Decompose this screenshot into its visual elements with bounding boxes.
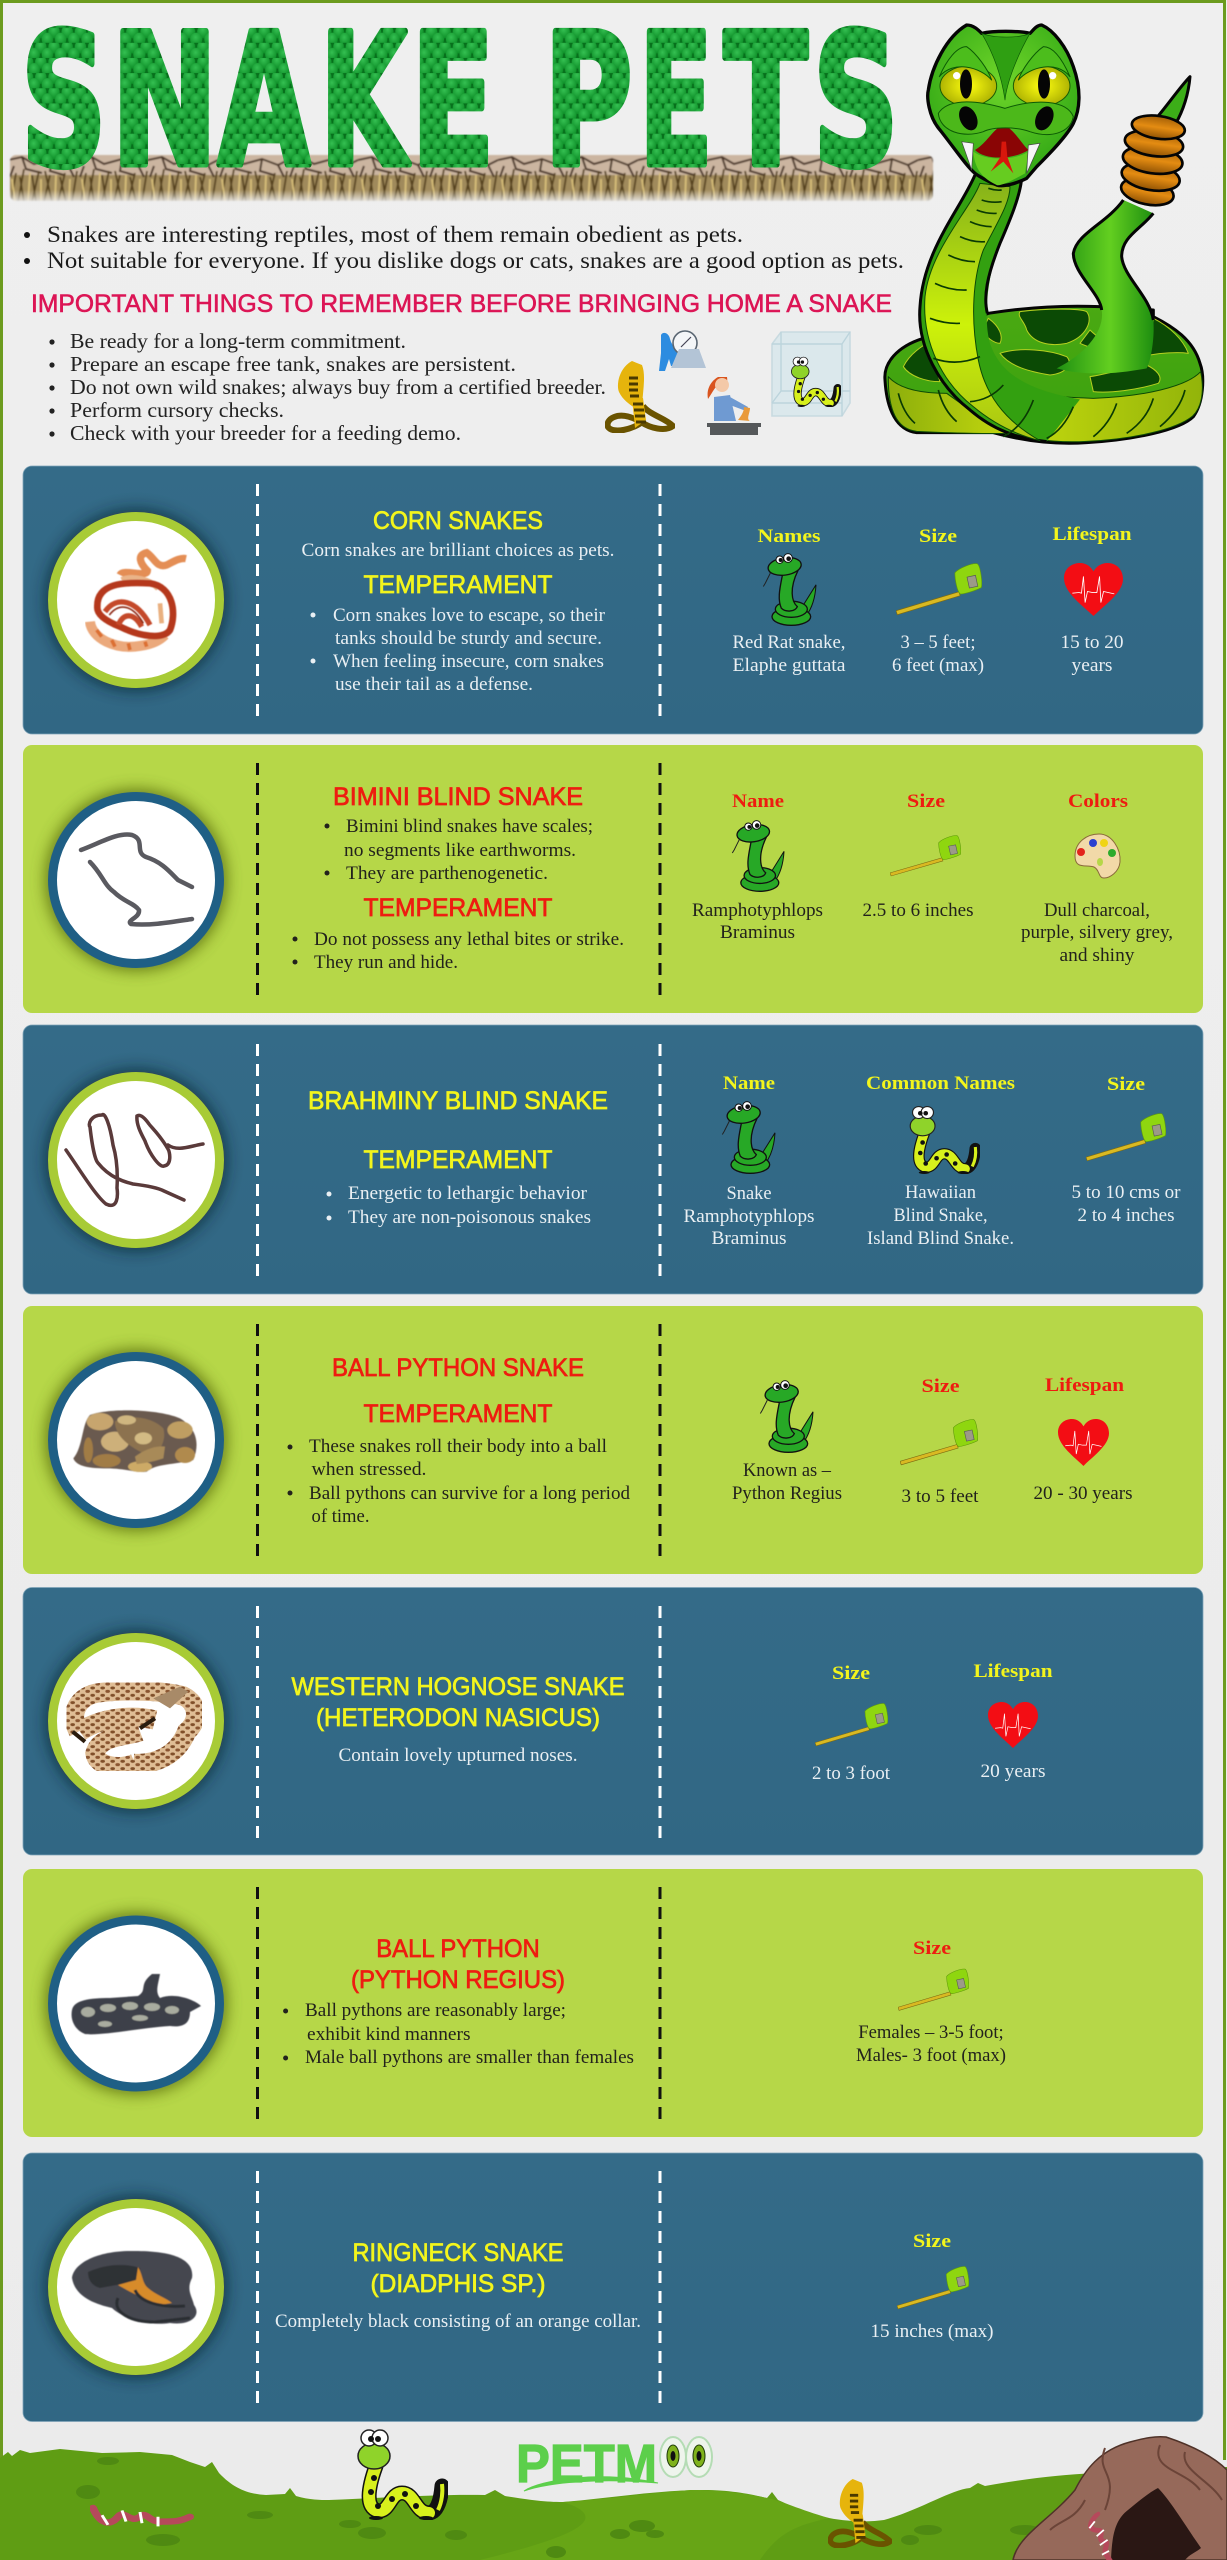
fact: size: Males- 3 foot (max) <box>856 2046 1006 2066</box>
fact: size <box>862 791 974 921</box>
fact: names: Red Rat snake, <box>732 633 846 653</box>
fact: size: 2 to 4 inches <box>1078 1206 1174 1226</box>
fact: known as: Known as – <box>743 1461 832 1481</box>
fact: colors: Colors <box>1068 791 1128 812</box>
heading: BALL PYTHON SNAKE <box>332 1354 584 1382</box>
head <box>928 25 1079 186</box>
coil markings <box>903 309 1188 392</box>
fact: name: Snake <box>726 1184 772 1204</box>
fact: size: Size <box>907 791 945 812</box>
brows <box>939 47 992 80</box>
fact: name <box>684 1073 814 1249</box>
panel: bimini blind snake <box>23 745 1203 1013</box>
body <box>920 175 1080 442</box>
heading: (PYTHON REGIUS) <box>351 1966 565 1994</box>
photo: hognose snake <box>46 1631 226 1811</box>
photo: bimini blind snake <box>46 790 226 970</box>
fact: name: Braminus <box>720 923 795 943</box>
description: Corn snakes are brilliant choices as pets. <box>302 541 614 561</box>
lower jaw <box>973 152 1028 185</box>
icon: cobra <box>608 361 673 431</box>
fact: name: Braminus <box>712 1229 786 1249</box>
title: N <box>111 0 218 208</box>
title: P <box>544 0 632 208</box>
checklist: Do not own wild snakes; always buy from a certified breeder. <box>70 375 606 399</box>
logo: petmoo: PETM <box>516 2434 657 2494</box>
description list: They are parthenogenetic. <box>346 864 548 884</box>
description list: Male ball pythons are smaller than females <box>305 2048 634 2068</box>
temperament list: use their tail as a defense. <box>335 675 533 695</box>
description list <box>283 2001 634 2068</box>
fact: size <box>892 526 984 676</box>
title: K <box>320 0 410 207</box>
temperament list: When feeling insecure, corn snakes <box>333 652 604 672</box>
heading: (HETERODON NASICUS) <box>316 1704 600 1732</box>
fact: size <box>870 2231 994 2342</box>
heading: RINGNECK SNAKE <box>352 2239 564 2267</box>
fact: size: Females – 3-5 foot; <box>858 2023 1004 2043</box>
logo: petmoo: OO <box>661 2439 712 2476</box>
fact: lifespan: years <box>1072 656 1112 676</box>
fact: size: Size <box>919 526 957 547</box>
photo: corn snake <box>46 510 226 690</box>
temperament list <box>310 606 605 695</box>
heading: temperament: TEMPERAMENT <box>364 1400 552 1428</box>
description list: no segments like earthworms. <box>344 841 576 861</box>
fact: size: Size <box>1107 1074 1145 1095</box>
fact: colors: and shiny <box>1060 946 1135 966</box>
tail tip <box>1153 77 1190 125</box>
belly ribs <box>898 188 1185 438</box>
title: S <box>21 0 107 208</box>
fact: common names: Blind Snake, <box>894 1206 988 1226</box>
heading: BRAHMINY BLIND SNAKE <box>308 1087 608 1115</box>
coil <box>885 306 1203 443</box>
fact: common names: Hawaiian <box>905 1183 976 1203</box>
subheading: IMPORTANT THINGS TO REMEMBER BEFORE BRINGING HOME A SNAKE <box>31 290 892 318</box>
temperament list: Corn snakes love to escape, so their <box>333 606 605 626</box>
fact: size: 3 to 5 feet <box>902 1487 979 1507</box>
eyes <box>940 66 997 106</box>
heading: CORN SNAKES <box>373 507 543 535</box>
fact: size: 6 feet (max) <box>892 656 984 676</box>
fact: size: 2.5 to 6 inches <box>862 901 974 921</box>
heading: BALL PYTHON <box>376 1935 540 1963</box>
intro text: Not suitable for everyone. If you dislike dogs or cats, snakes are a good option as pets. <box>47 248 904 273</box>
heading <box>352 2239 564 2298</box>
temperament list: They run and hide. <box>314 953 458 973</box>
head stripe <box>982 33 1030 100</box>
title: T <box>724 0 807 207</box>
title <box>21 0 899 208</box>
tail outline <box>1073 200 1153 320</box>
fact: size: 15 inches (max) <box>870 2322 994 2342</box>
fact: colors: purple, silvery grey, <box>1021 923 1173 943</box>
belly <box>925 183 1040 441</box>
fact: lifespan <box>1052 524 1132 676</box>
fact: lifespan <box>974 1661 1053 1782</box>
fact: name: Ramphotyphlops <box>692 901 823 921</box>
fact: size: Size <box>913 2231 951 2252</box>
fact: size: 3 – 5 feet; <box>900 633 976 653</box>
fact: names: Elaphe guttata <box>732 656 846 676</box>
fact: size: 5 to 10 cms or <box>1072 1183 1180 1203</box>
fact: name <box>692 791 823 943</box>
icon: footer worm <box>93 2508 190 2526</box>
checklist: Check with your breeder for a feeding demo. <box>70 421 461 445</box>
title: S <box>813 0 899 208</box>
icon: clock and person <box>659 331 706 371</box>
checklist: Be ready for a long-term commitment. <box>70 329 406 353</box>
temperament list: Ball pythons can survive for a long period <box>309 1484 631 1504</box>
heading <box>292 1673 624 1732</box>
mouth <box>975 125 1028 158</box>
temperament list: tanks should be sturdy and secure. <box>335 629 602 649</box>
intro text: Snakes are interesting reptiles, most of them remain obedient as pets. <box>47 222 743 247</box>
fact: known as: Python Regius <box>732 1484 842 1504</box>
fact: name: Name <box>732 791 784 812</box>
temperament list <box>326 1184 591 1228</box>
fact: size: Size <box>832 1663 870 1684</box>
fact: known as <box>732 1381 842 1504</box>
heading: WESTERN HOGNOSE SNAKE <box>292 1673 624 1701</box>
panel: ball python regius <box>23 1869 1203 2137</box>
fact: size: Size <box>922 1376 960 1397</box>
tongue <box>991 142 1013 173</box>
title: E <box>639 0 713 208</box>
icon: palette <box>1075 834 1120 878</box>
panel: ball python snake <box>23 1306 1203 1574</box>
checklist <box>49 329 606 445</box>
fact: size <box>856 1938 1006 2066</box>
snout <box>938 102 1073 135</box>
coil lower band <box>888 363 1202 442</box>
description: Contain lovely upturned noses. <box>338 1746 578 1766</box>
fact: lifespan: 15 to 20 <box>1060 633 1124 653</box>
fangs <box>962 142 1040 173</box>
temperament list <box>288 1437 631 1527</box>
footer: grass hills <box>0 2449 1227 2560</box>
fact: lifespan: 20 - 30 years <box>1034 1484 1132 1504</box>
fact: lifespan: Lifespan <box>974 1661 1053 1682</box>
fact: colors <box>1021 791 1173 966</box>
illustration: large rattlesnake <box>885 25 1203 443</box>
icon: vet with snake <box>707 377 761 435</box>
description: Completely black consisting of an orange collar. <box>275 2312 641 2332</box>
description list: Bimini blind snakes have scales; <box>346 817 593 837</box>
temperament list: of time. <box>312 1507 370 1527</box>
fact: common names <box>866 1073 1015 1249</box>
icon: footer cobra <box>830 2479 890 2546</box>
temperament list: They are non-poisonous snakes <box>348 1208 591 1228</box>
fact: name: Ramphotyphlops <box>684 1207 814 1227</box>
title: A <box>218 0 310 208</box>
fact: size: Size <box>913 1938 951 1959</box>
cracked earth and grass strip <box>8 155 935 203</box>
panel: brahminy blind snake <box>23 1025 1203 1294</box>
fact: size: 2 to 3 foot <box>812 1764 891 1784</box>
temperament list: when stressed. <box>312 1460 426 1480</box>
fact: names <box>732 526 846 676</box>
fact: lifespan <box>1034 1375 1132 1504</box>
panel: western hognose snake <box>23 1588 1203 1855</box>
heading: (DIADPHIS SP.) <box>370 2270 546 2298</box>
fact: size <box>900 1376 979 1507</box>
photo: ball python <box>46 1350 226 1530</box>
description list: exhibit kind manners <box>307 2025 470 2045</box>
heading: temperament: TEMPERAMENT <box>364 894 552 922</box>
temperament list: These snakes roll their body into a ball <box>309 1437 607 1457</box>
checklist: Prepare an escape free tank, snakes are persistent. <box>70 352 516 376</box>
icon: glass tank with snake <box>772 332 850 416</box>
photo: python regius <box>46 1914 226 2094</box>
intro text <box>24 222 904 273</box>
temperament list: Do not possess any lethal bites or strike. <box>314 930 624 950</box>
temperament list <box>292 930 624 973</box>
fact: lifespan: Lifespan <box>1052 524 1132 545</box>
heading <box>351 1935 565 1994</box>
fact: names: Names <box>758 526 820 547</box>
fact: colors: Dull charcoal, <box>1044 901 1150 921</box>
photo: ringneck snake <box>46 2197 226 2377</box>
icon: footer yellow snake <box>358 2430 442 2520</box>
heading: BIMINI BLIND SNAKE <box>333 783 583 811</box>
tail <box>1057 200 1154 373</box>
heading: temperament: TEMPERAMENT <box>364 1146 552 1174</box>
fact: name: Name <box>723 1073 775 1094</box>
fact: lifespan: Lifespan <box>1045 1375 1124 1396</box>
fact: size <box>1072 1074 1180 1226</box>
temperament list: Energetic to lethargic behavior <box>348 1184 587 1204</box>
heading: temperament: TEMPERAMENT <box>364 571 552 599</box>
panel: ringneck snake <box>23 2153 1203 2422</box>
title: E <box>411 0 495 207</box>
fact: size <box>812 1663 891 1784</box>
photo: brahminy blind snake <box>46 1070 226 1250</box>
checklist: Perform cursory checks. <box>70 398 284 422</box>
fact: common names: Common Names <box>866 1073 1015 1094</box>
fact: lifespan: 20 years <box>980 1762 1046 1782</box>
rattle <box>1119 112 1186 210</box>
description list: Ball pythons are reasonably large; <box>305 2001 566 2021</box>
illustration: cave <box>1013 2437 1227 2560</box>
description list <box>324 817 593 884</box>
panel: corn snakes <box>23 466 1203 734</box>
fact: common names: Island Blind Snake. <box>867 1229 1014 1249</box>
body outline <box>920 175 1047 442</box>
